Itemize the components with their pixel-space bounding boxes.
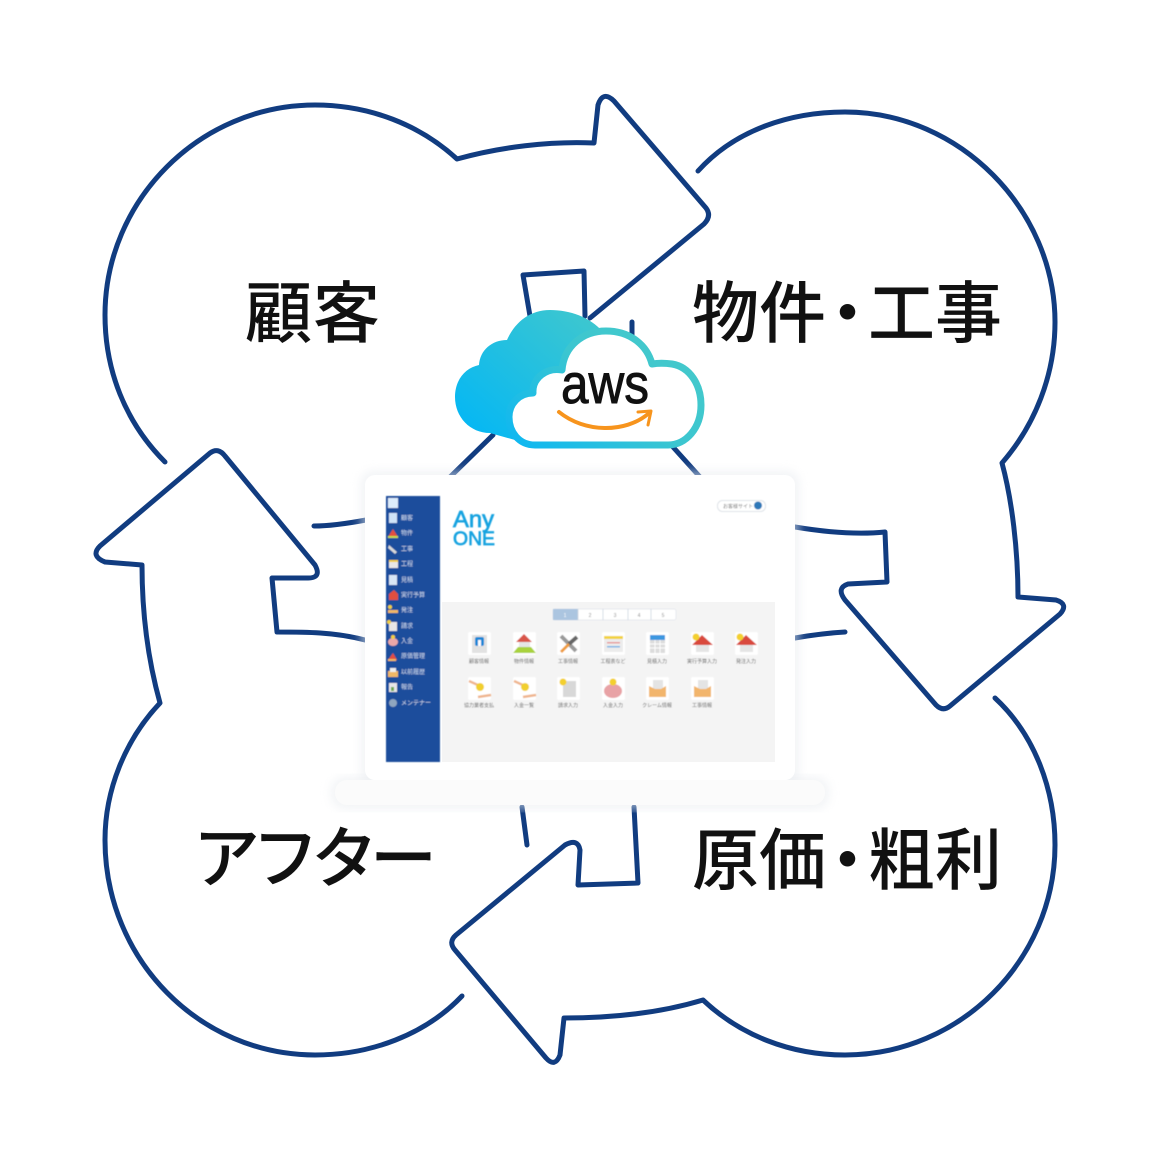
arrow outline: cost to after-sales <box>452 698 1055 1062</box>
back cloud <box>455 310 603 440</box>
icon: schedule: 工程表など <box>600 658 626 665</box>
heading: property and construction: 物件 <box>692 277 826 352</box>
sidebar labels <box>401 514 431 707</box>
icon: tray 2 <box>691 677 714 709</box>
tabs: 5 <box>662 613 665 619</box>
icon: billing hand 2: 入金一覧 <box>514 702 534 709</box>
icon: calculator <box>646 632 669 665</box>
laptop screen <box>365 475 795 780</box>
sidebar labels: 顧客 <box>401 514 413 522</box>
sidebar labels: 報告 <box>401 683 413 691</box>
sidebar labels: 発注 <box>401 606 413 614</box>
tabs: 3 <box>614 613 617 619</box>
sidebar labels: 以前履歴 <box>401 668 425 676</box>
tabs: 2 <box>589 613 592 619</box>
icon: tools <box>557 632 580 665</box>
icon: order house <box>735 632 758 665</box>
icon: piggy bank <box>602 677 625 709</box>
icon: billing hand 1 <box>464 677 494 709</box>
icon: customer: 顧客情報 <box>469 658 489 665</box>
sidebar labels: 入金 <box>401 637 413 645</box>
tabs: 1 <box>564 613 567 619</box>
icon: billing hand 2 <box>513 677 536 709</box>
heading: cost and gross profit: 粗利 <box>868 824 1002 899</box>
logo: AnyONE <box>453 506 495 550</box>
heading: after-sales: アフター <box>193 822 437 897</box>
icon: order house: 発注入力 <box>736 658 756 665</box>
tabs: 4 <box>638 613 641 619</box>
heading: cost and gross profit: 原価 <box>692 824 826 899</box>
amazon smile <box>559 411 651 428</box>
sidebar labels: 請求 <box>401 622 413 630</box>
heading: property and construction: 工事 <box>868 277 1002 352</box>
icon: tools: 工事情報 <box>558 658 578 665</box>
icon: billing hand 1: 協力業者支払 <box>464 702 494 709</box>
sidebar labels: 工程 <box>401 560 413 568</box>
laptop <box>331 471 829 809</box>
sidebar labels: メンテナー <box>401 700 431 707</box>
icon: budget house <box>687 632 717 665</box>
sidebar labels: 工事 <box>401 545 413 553</box>
sidebar <box>386 496 440 762</box>
tabs <box>553 609 676 620</box>
icon: budget house: 実行予算入力 <box>687 658 717 665</box>
sidebar labels: 物件 <box>401 529 413 537</box>
icon: invoice: 請求入力 <box>558 702 578 709</box>
menu icon grid <box>464 632 758 709</box>
heading: cost and gross profit: ・ <box>814 824 881 899</box>
icon: calculator: 見積入力 <box>647 658 667 665</box>
sidebar labels: 見積 <box>401 576 413 584</box>
icon: invoice <box>557 677 580 709</box>
arrow outline: customers to property <box>105 96 709 526</box>
sidebar labels: 原価管理 <box>401 652 425 660</box>
front cloud <box>509 331 701 445</box>
icon: schedule <box>600 632 626 665</box>
icon: piggy bank: 入金入力 <box>603 702 623 709</box>
icon: property <box>513 632 536 665</box>
icon: customer <box>468 632 491 665</box>
AWS cloud <box>455 310 701 445</box>
support button: お客様サイト <box>723 503 753 510</box>
laptop base <box>335 780 825 805</box>
aws wordmark: aws <box>561 352 649 415</box>
content panel <box>442 602 775 762</box>
heading: customers: 顧客 <box>245 277 380 352</box>
heading: property and construction: ・ <box>814 277 881 352</box>
icon: tray 2: 工事情報 <box>692 702 712 709</box>
logo: AnyONE: ONE <box>453 529 495 550</box>
sidebar labels: 実行予算 <box>401 591 425 599</box>
logo: AnyONE: Any <box>453 506 495 532</box>
icon: tray 1 <box>642 677 672 709</box>
support button <box>718 500 766 512</box>
arrow outline: property to cost <box>632 112 1064 709</box>
arrow outline: after-sales to customers <box>96 451 462 1055</box>
icon: tray 1: クレーム情報 <box>642 702 672 709</box>
icon: property: 物件情報 <box>514 658 534 665</box>
